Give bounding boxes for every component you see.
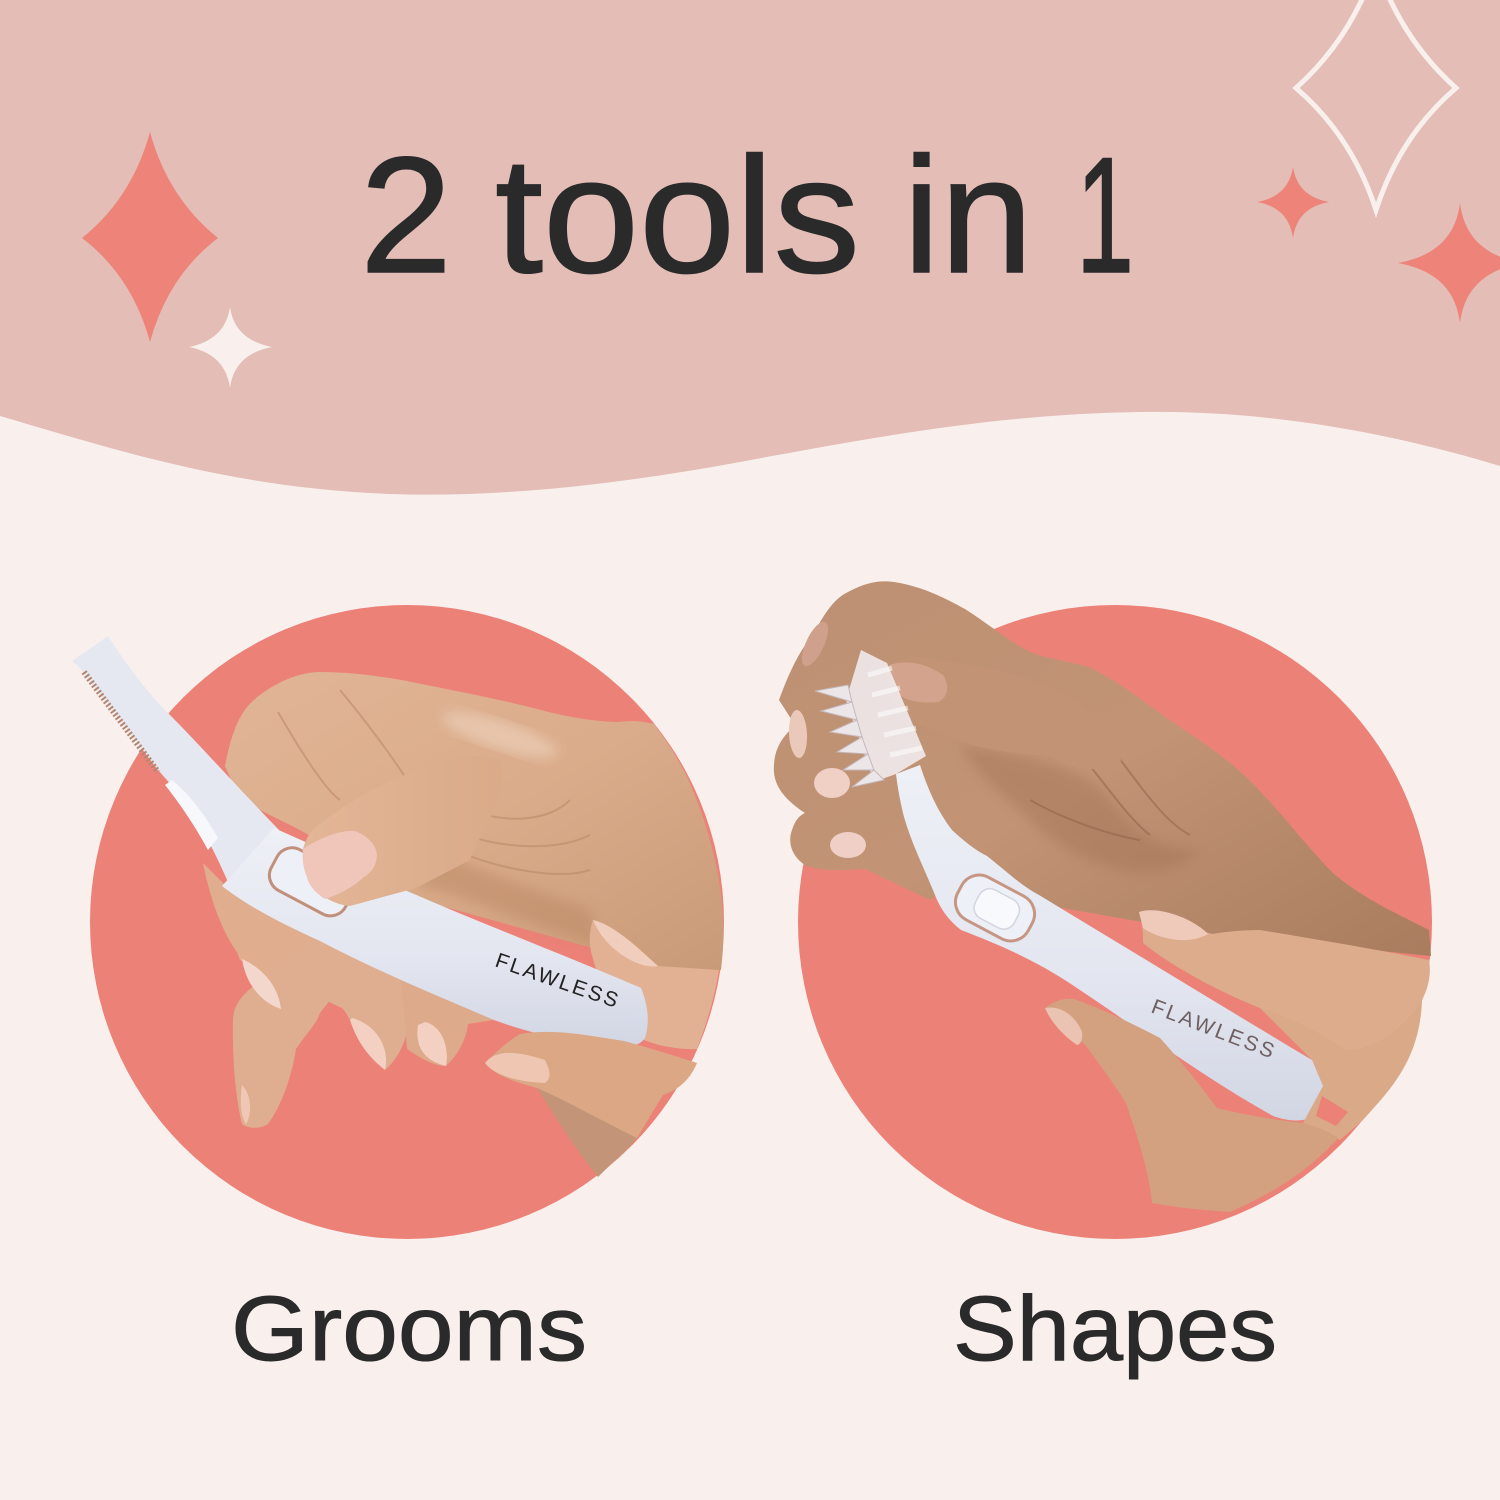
label: shapes: Shapes (953, 1278, 1277, 1380)
title: tools (495, 123, 860, 307)
brand label: FLAWLESS (492, 949, 623, 1013)
tooth 3 (830, 720, 862, 737)
copper ring (948, 868, 1042, 948)
lower thumb nail (485, 1053, 550, 1083)
title: in (903, 123, 1033, 307)
pink gap (1316, 1096, 1348, 1126)
finger 4 (400, 965, 494, 1066)
palm creases (1030, 740, 1190, 840)
button ring (263, 842, 359, 922)
upper hand (774, 581, 1431, 956)
device handle (222, 828, 648, 1046)
brand label: FLAWLESS (1148, 995, 1280, 1064)
tooth 5 (843, 754, 874, 770)
header wave band (0, 0, 1500, 495)
highlight on hand (439, 703, 561, 767)
finger 3 (311, 945, 407, 1070)
button (948, 868, 1042, 948)
index finger (1139, 912, 1430, 1050)
tooth 2 (821, 702, 857, 720)
nail 2 (788, 710, 808, 758)
shadow under thumb (415, 850, 600, 945)
clear comb guard (846, 650, 926, 782)
sparkle: small coral (1257, 167, 1329, 238)
hand: back of hand and palm (225, 672, 723, 970)
title (360, 123, 1134, 307)
palm crease shading (960, 745, 1200, 872)
thumb nail (303, 831, 377, 899)
label: grooms: Grooms (231, 1278, 587, 1380)
sparkle: small white (189, 307, 272, 388)
device grooming head (72, 636, 280, 884)
left fingertip nails (788, 618, 866, 858)
switch (970, 884, 1024, 933)
lower thumb (1045, 999, 1338, 1212)
clear window (165, 780, 218, 850)
sparkle: right coral (1398, 203, 1500, 323)
tooth 4 (837, 737, 868, 754)
sparkle: white outline (1296, 0, 1456, 210)
index nail (593, 920, 658, 967)
title: 1 (1076, 123, 1134, 307)
upper thumb (887, 657, 1121, 769)
finger 2 (233, 941, 346, 1128)
title: 2 (360, 123, 452, 307)
nail 4 (830, 832, 866, 858)
index finger (590, 920, 719, 1049)
lower hand and wrist (1260, 1000, 1422, 1140)
panel: grooms (72, 605, 724, 1239)
sparkle: large coral (82, 132, 218, 342)
comb teeth (815, 685, 884, 787)
right circle (798, 605, 1432, 1239)
index nail (1139, 910, 1208, 940)
upper thumb nail (889, 662, 947, 703)
nail 1 (797, 618, 833, 670)
thumb pressing button (303, 756, 502, 906)
tooth 1 (815, 685, 852, 702)
finger base (210, 880, 480, 1020)
lower thumb nail (1045, 1007, 1082, 1045)
nail 3 (814, 768, 850, 798)
left circle (90, 605, 724, 1239)
lower thumb (485, 1032, 697, 1138)
button (263, 842, 359, 922)
lower fingers (203, 863, 494, 1128)
finger 1 (203, 863, 320, 1009)
serrated blade (84, 672, 158, 772)
hand creases (278, 690, 590, 874)
panel: shapes (774, 581, 1432, 1239)
device handle (896, 765, 1323, 1120)
tooth 6 (852, 770, 884, 787)
nails (242, 959, 281, 1009)
comb ribs (868, 668, 922, 755)
lower hand (537, 1085, 663, 1177)
